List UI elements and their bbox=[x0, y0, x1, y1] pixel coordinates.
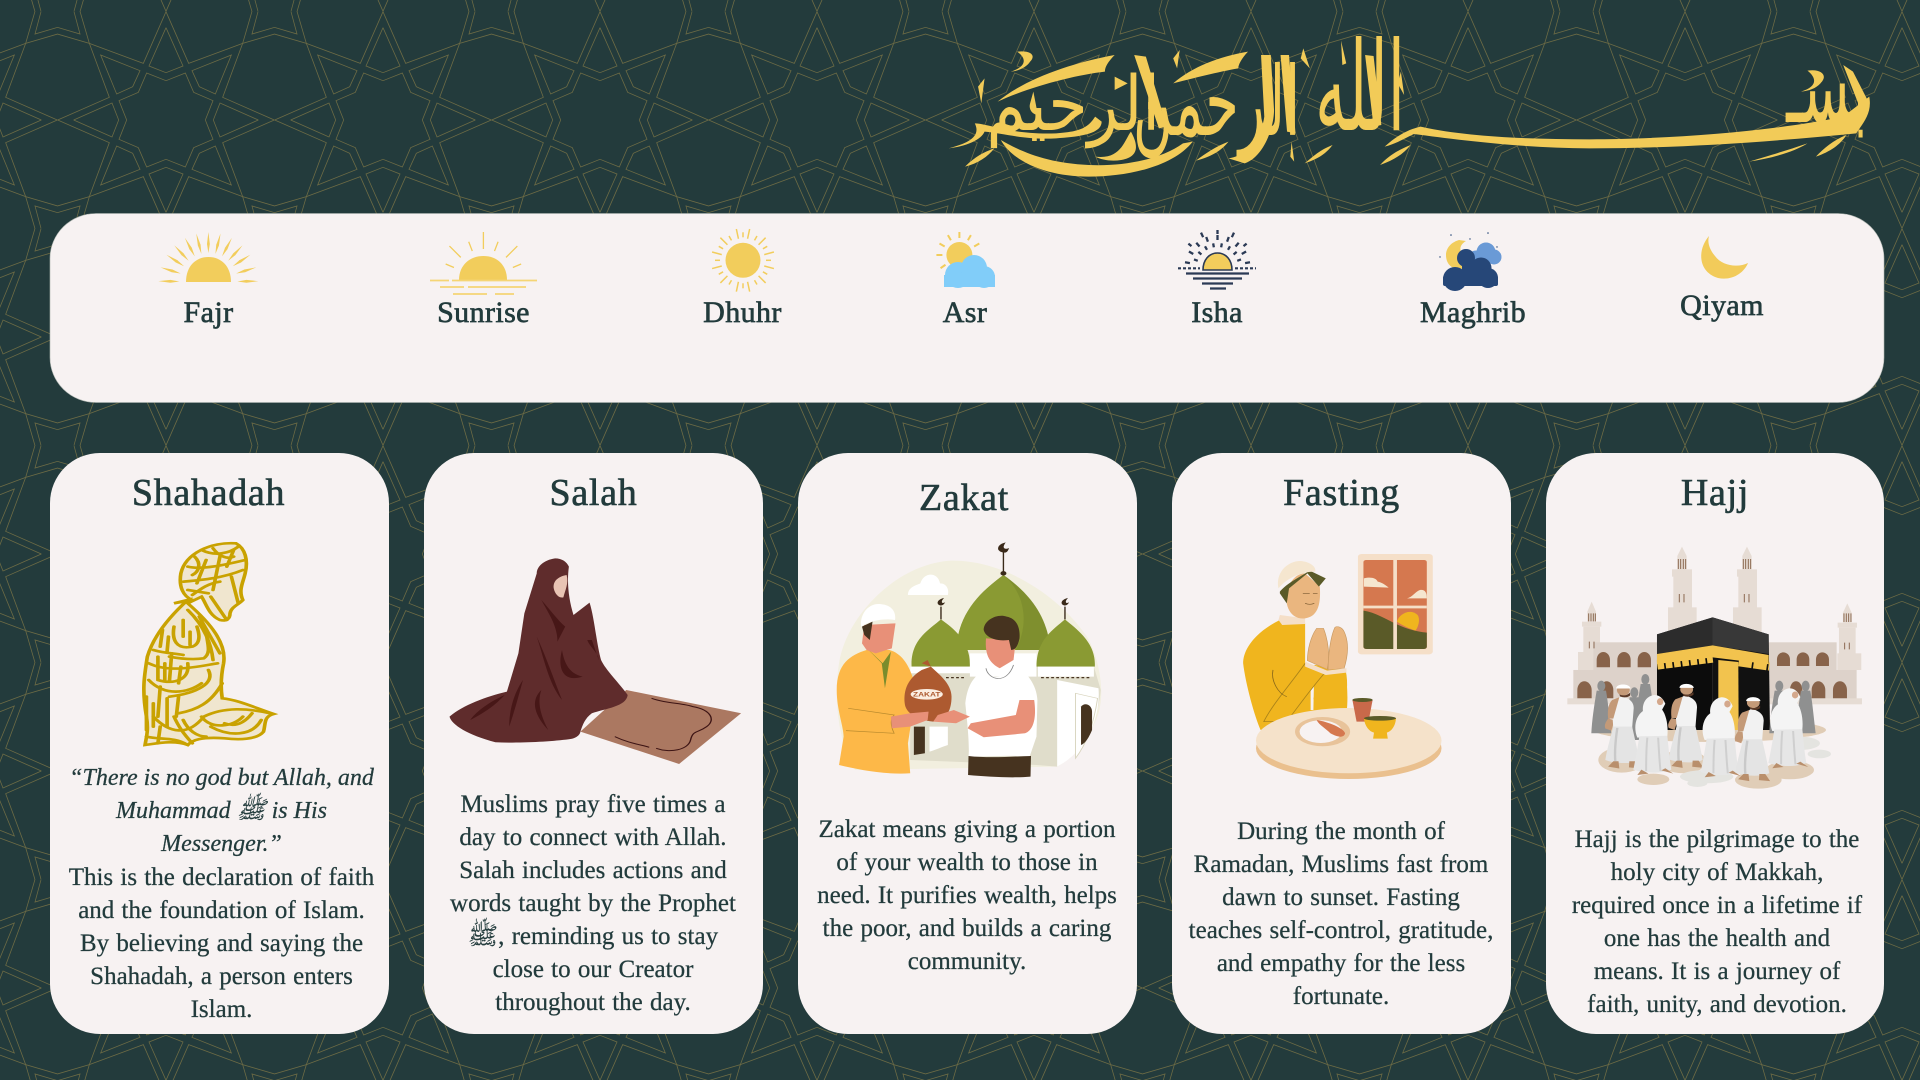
text: Hajj description bbox=[1572, 826, 1863, 1018]
panel: Fasting bbox=[1172, 453, 1511, 1034]
heading: Fasting: Fasting bbox=[1283, 472, 1400, 514]
title: Bismillah calligraphy: بسـ bbox=[1785, 25, 1868, 147]
text: Shahadah description: and the foundation of Islam. bbox=[78, 897, 365, 924]
text: Salah description: Salah includes actions and bbox=[459, 857, 727, 884]
panel: Hajj bbox=[1546, 453, 1884, 1034]
text: Zakat description: need. It purifies wealth, helps bbox=[817, 882, 1117, 909]
panel: Shahadah bbox=[50, 453, 389, 1034]
text: Shahadah description: This is the declaration of faith bbox=[69, 864, 375, 891]
text: Shahadah description: “There is no god but Allah, and bbox=[69, 765, 375, 791]
text: Salah description: words taught by the Prophet bbox=[450, 890, 736, 917]
heading: Salah: Salah bbox=[550, 472, 637, 514]
text: Zakat description: community. bbox=[908, 948, 1026, 975]
heading: Zakat: Zakat bbox=[919, 477, 1009, 519]
label: Fajr: Fajr bbox=[184, 296, 233, 329]
text: Hajj description: holy city of Makkah, bbox=[1611, 859, 1823, 886]
label: Asr: Asr bbox=[943, 296, 987, 329]
text: Fasting description bbox=[1189, 818, 1493, 1010]
text: Salah description: day to connect with Allah. bbox=[459, 824, 727, 851]
text: Salah description bbox=[450, 791, 736, 1016]
text: Fasting description: fortunate. bbox=[1293, 983, 1389, 1010]
icon: Maghrib moon and clouds bbox=[1439, 232, 1502, 291]
text: Fasting description: During the month of bbox=[1237, 818, 1446, 845]
text: Fasting description: dawn to sunset. Fasting bbox=[1222, 884, 1460, 911]
label: Isha: Isha bbox=[1191, 296, 1243, 329]
title: Bismillah calligraphy: الله bbox=[1315, 16, 1405, 160]
icon: Isha sunset rays bbox=[1178, 230, 1256, 288]
label: Qiyam: Qiyam bbox=[1680, 289, 1764, 322]
illustration: woman praying on a rug bbox=[450, 558, 741, 764]
text: Salah description: close to our Creator bbox=[493, 956, 694, 983]
text: Fasting description: Ramadan, Muslims fast from bbox=[1194, 851, 1489, 878]
icon: Qiyam crescent bbox=[1701, 236, 1748, 279]
text: Shahadah description: Messenger.” bbox=[160, 831, 282, 857]
text: Shahadah description: Shahadah, a person enters bbox=[90, 963, 353, 990]
panel: Zakat bbox=[798, 453, 1137, 1034]
text: Zakat description: of your wealth to those in bbox=[836, 849, 1098, 876]
text: Salah description: ﷺ, reminding us to stay bbox=[468, 917, 719, 950]
label: Dhuhr: Dhuhr bbox=[703, 296, 782, 329]
text: Shahadah description: By believing and saying the bbox=[80, 930, 363, 957]
illustration: zakat giving at mosque bbox=[837, 543, 1101, 777]
label: Sunrise: Sunrise bbox=[437, 296, 530, 329]
icon: Asr sun and cloud bbox=[936, 232, 995, 288]
text: Zakat description: Zakat means giving a portion bbox=[819, 816, 1116, 843]
text: Hajj description: required once in a lifetime if bbox=[1572, 892, 1863, 919]
text: Hajj description: means. It is a journey of bbox=[1594, 958, 1841, 985]
panel: prayer times bbox=[50, 214, 1884, 402]
text: Hajj description: Hajj is the pilgrimage to the bbox=[1575, 826, 1859, 853]
icon: Fajr sun bbox=[158, 232, 258, 283]
icon: Sunrise bbox=[430, 232, 537, 294]
text: Hajj description: one has the health and bbox=[1604, 925, 1831, 952]
illustration: man making dua at iftar table bbox=[1243, 554, 1442, 779]
label: Maghrib: Maghrib bbox=[1420, 296, 1526, 329]
heading: Hajj: Hajj bbox=[1681, 472, 1749, 514]
title: Bismillah calligraphy bbox=[949, 16, 1870, 177]
icon: Dhuhr sun bbox=[712, 229, 774, 292]
text: Shahadah description bbox=[69, 765, 375, 1023]
text: Hajj description: faith, unity, and devotion. bbox=[1587, 991, 1847, 1018]
text: Zakat description: the poor, and builds a caring bbox=[823, 915, 1112, 942]
text: Fasting description: and empathy for the less bbox=[1217, 950, 1465, 977]
text: Salah description: Muslims pray five times a bbox=[460, 791, 726, 818]
text: Salah description: throughout the day. bbox=[495, 989, 691, 1016]
illustration: zakat giving at mosque: ZAKAT bbox=[913, 691, 941, 698]
illustration: calligraphic kneeling figure bbox=[144, 543, 274, 745]
text: Shahadah description: Islam. bbox=[191, 996, 252, 1023]
text: Fasting description: teaches self-control, gratitude, bbox=[1189, 917, 1493, 944]
illustration: Kaaba and pilgrims bbox=[1567, 547, 1862, 789]
title: Bismillah calligraphy: الرحيم bbox=[987, 61, 1160, 148]
panel: Salah bbox=[424, 453, 763, 1034]
heading: Shahadah: Shahadah bbox=[132, 472, 285, 514]
title: Bismillah calligraphy: الرحمن bbox=[1133, 47, 1300, 158]
text: Zakat description bbox=[817, 816, 1117, 975]
text: Shahadah description: Muhammad ﷺ is His bbox=[115, 792, 327, 824]
